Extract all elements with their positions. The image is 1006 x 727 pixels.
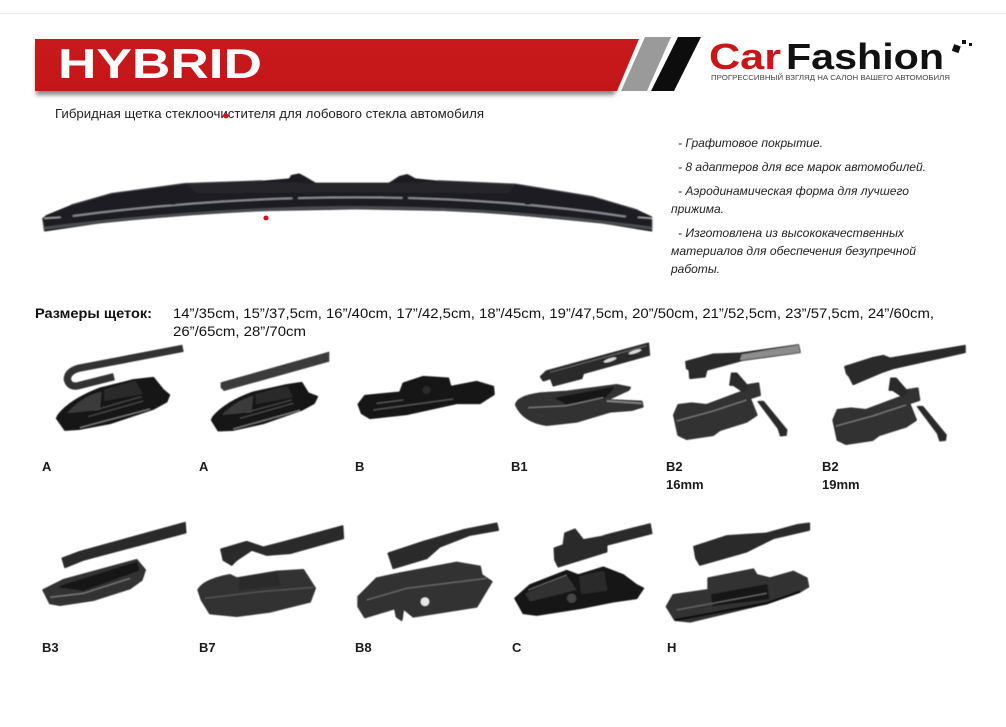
sizes list: 26”/65cm, 28”/70cm [173, 323, 306, 339]
label A: A [199, 459, 209, 474]
feature list: - Графитовое покрытие. [678, 136, 823, 150]
adapter C [515, 524, 652, 615]
label B2 19mm: 19mm [822, 477, 860, 492]
adapter B [358, 377, 494, 418]
header banner [35, 37, 701, 95]
adapter B1 [516, 343, 649, 425]
label B3: B3 [42, 640, 59, 655]
logo: CarFashion: Car [709, 36, 781, 77]
feature list: - Аэродинамическая форма для лучшего [678, 184, 909, 198]
adapter B7 [198, 526, 343, 616]
subtitle: Гибридная щетка стеклоочистителя для лобового стекла автомобиля [55, 106, 484, 121]
black slanted stripe [651, 37, 701, 91]
logo: CarFashion: ПРОГРЕССИВНЫЙ ВЗГЛЯД НА САЛОН ВАШЕГО АВТОМОБИЛЯ [711, 73, 950, 82]
sizes label: Размеры щеток: [35, 305, 152, 321]
banner title: HYBRID [58, 40, 262, 87]
label A: A [42, 459, 52, 474]
label B2 19mm [822, 459, 860, 492]
sizes list: 14”/35cm, 15”/37,5cm, 16”/40cm, 17”/42,5cm, 18”/45cm, 19”/47,5cm, 20”/50cm, 21”/52,5cm, 23”/57,5cm, 24”/60cm, [173, 305, 934, 321]
label C: C [512, 640, 522, 655]
adapter A with hook [57, 348, 183, 430]
adapter B2 19mm [833, 346, 965, 444]
feature list [670, 136, 926, 276]
logo: CarFashion: Fashion [786, 36, 944, 77]
adapter H [667, 523, 809, 622]
feature list: - 8 адаптеров для все марок автомобилей. [678, 160, 926, 174]
red banner bar [35, 39, 639, 91]
label B7: B7 [199, 640, 216, 655]
wiper blade illustration [42, 173, 652, 232]
label B2 16mm [666, 459, 704, 492]
logo: CarFashion [709, 36, 972, 82]
adapter B2 16mm [674, 345, 800, 439]
adapter A straight [212, 352, 329, 431]
label H: H [667, 640, 676, 655]
feature list: работы. [670, 262, 720, 276]
label B: B [355, 459, 364, 474]
feature list: прижима. [671, 202, 724, 216]
adapter B3 [43, 523, 186, 605]
label B8: B8 [355, 640, 372, 655]
feature list: - Изготовлена из высококачественных [678, 226, 905, 240]
red dot near subtitle [224, 114, 228, 118]
grey slanted stripe [621, 37, 671, 91]
feature list: материалов для обеспечения безупречной [671, 244, 916, 258]
label B2 16mm: 16mm [666, 477, 704, 492]
label B1: B1 [511, 459, 528, 474]
label B2 16mm: B2 [666, 459, 683, 474]
red dot under blade [264, 216, 268, 220]
sizes list [173, 305, 934, 339]
adapter B8 [358, 523, 498, 620]
label B2 19mm: B2 [822, 459, 839, 474]
